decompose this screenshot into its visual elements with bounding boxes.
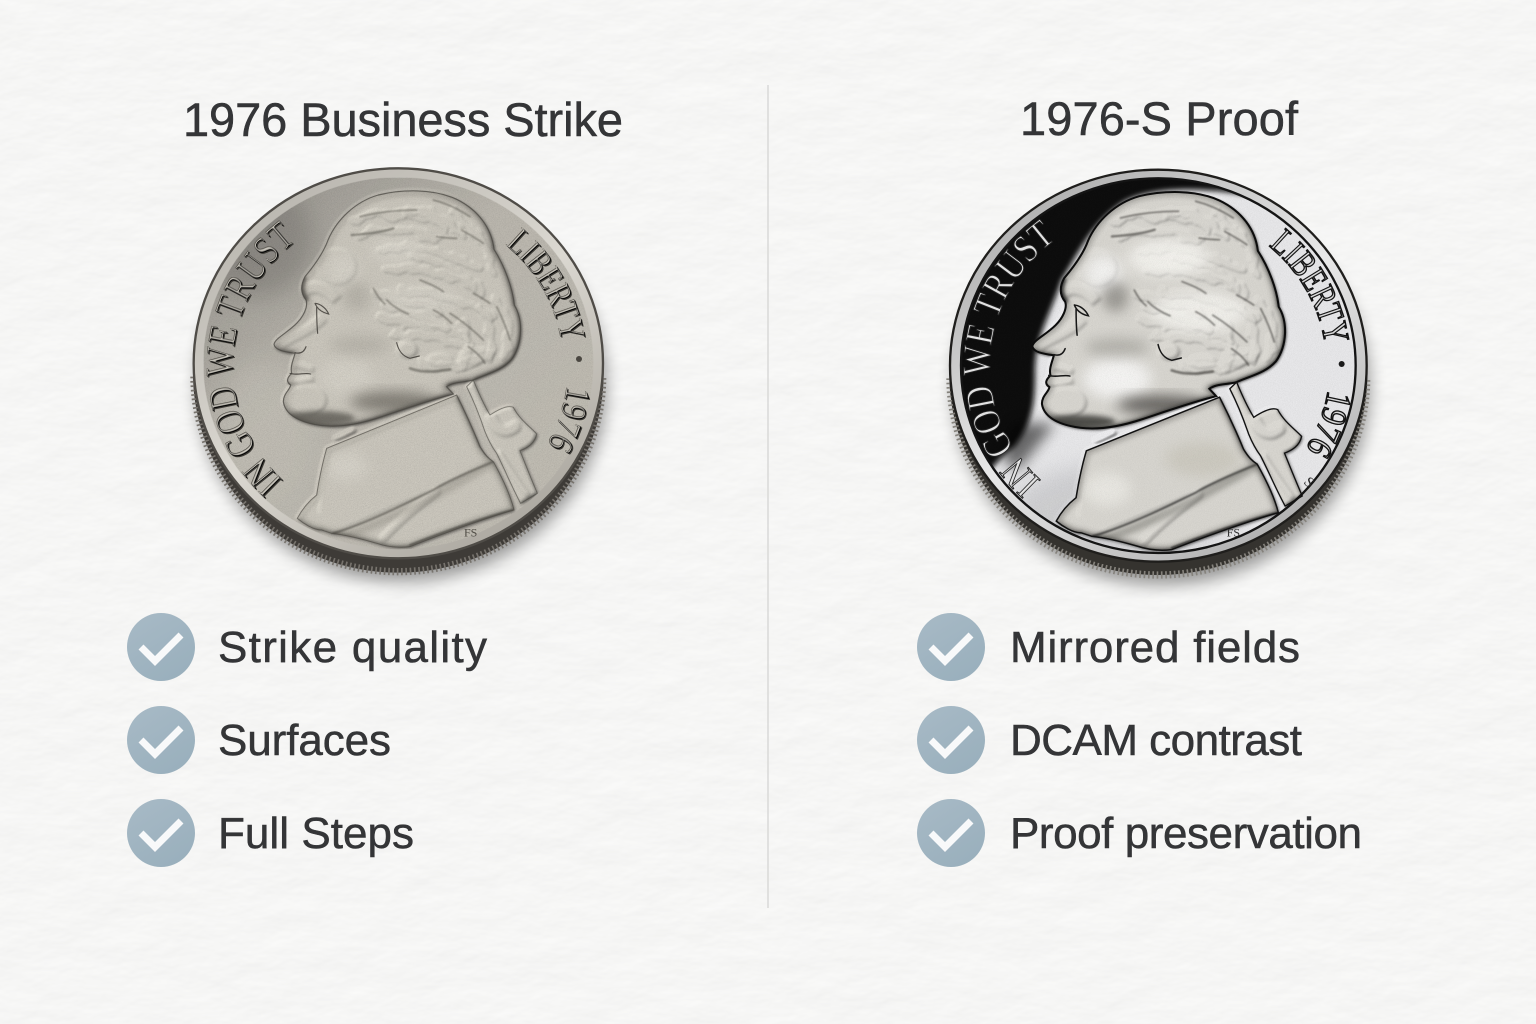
text baseline paths for coin lettering xyxy=(160,241,1179,962)
check icon: full steps xyxy=(127,799,195,867)
separator dot xyxy=(576,356,582,362)
head shading xyxy=(274,191,521,426)
inner rim line xyxy=(961,178,1356,553)
designer initials: FS xyxy=(464,526,477,540)
lower field shading xyxy=(1012,463,1232,557)
legend: LIBERTY: LIBERTY xyxy=(1268,227,1350,340)
black mirror reflection xyxy=(962,180,1244,476)
checklist: proof xyxy=(917,613,1362,867)
coat shading xyxy=(297,395,514,547)
heading: 1976-S Proof: 1976-S Proof xyxy=(1020,92,1299,145)
metal grain xyxy=(996,190,1354,551)
heading: 1976 Business Strike: 1976 Business Strike xyxy=(183,93,623,146)
raised rim xyxy=(950,170,1367,562)
checklist: business strike xyxy=(127,613,487,867)
check icon: DCAM contrast xyxy=(917,706,985,774)
outlines and facial lines xyxy=(274,191,537,547)
coin: 1976-S proof nickel xyxy=(943,168,1380,595)
relief lighting xyxy=(274,191,537,547)
label: Strike quality: Strike quality xyxy=(218,623,487,672)
label: Surfaces: Surfaces xyxy=(218,716,391,765)
check icon: mirrored fields xyxy=(917,613,985,681)
coin: 1976 business strike nickel xyxy=(186,167,617,592)
label: Full Steps: Full Steps xyxy=(218,809,414,858)
date: 1976: 1976 xyxy=(549,388,590,454)
vertical divider xyxy=(767,85,769,908)
outlines and facial lines xyxy=(1032,192,1302,550)
label: Proof preservation: Proof preservation xyxy=(1010,809,1362,858)
motto: IN GOD WE TRUST: IN GOD WE TRUST xyxy=(963,218,1053,499)
check icon: proof preservation xyxy=(917,799,985,867)
field lighting xyxy=(222,202,318,412)
check icon: strike quality xyxy=(127,613,195,681)
separator dot xyxy=(1339,361,1345,367)
raised rim xyxy=(194,168,603,558)
coin shadow xyxy=(953,192,1370,585)
mirrored field and frosted bust xyxy=(962,180,1354,552)
field base xyxy=(204,178,594,550)
bust base tone xyxy=(274,191,537,547)
motto: IN GOD WE TRUST: IN GOD WE TRUST xyxy=(206,220,294,500)
field base xyxy=(994,190,1354,552)
coin shadow xyxy=(197,192,607,582)
metal grain xyxy=(204,178,594,550)
legend: LIBERTY: LIBERTY xyxy=(506,227,586,338)
bust highlights xyxy=(328,244,454,478)
bust base tone xyxy=(1032,192,1302,550)
check icon: surfaces xyxy=(127,706,195,774)
field and bust in relief xyxy=(203,177,594,550)
designer initials: FS xyxy=(1227,526,1240,540)
reeded edge xyxy=(193,174,604,573)
bust highlights and shading xyxy=(1032,192,1285,550)
label: Mirrored fields: Mirrored fields xyxy=(1010,623,1300,672)
reeded edge xyxy=(949,175,1367,575)
relief lighting xyxy=(1032,192,1302,550)
label: DCAM contrast: DCAM contrast xyxy=(1010,716,1302,765)
mint mark S: S xyxy=(1300,474,1317,491)
date: 1976: 1976 xyxy=(1307,392,1350,460)
